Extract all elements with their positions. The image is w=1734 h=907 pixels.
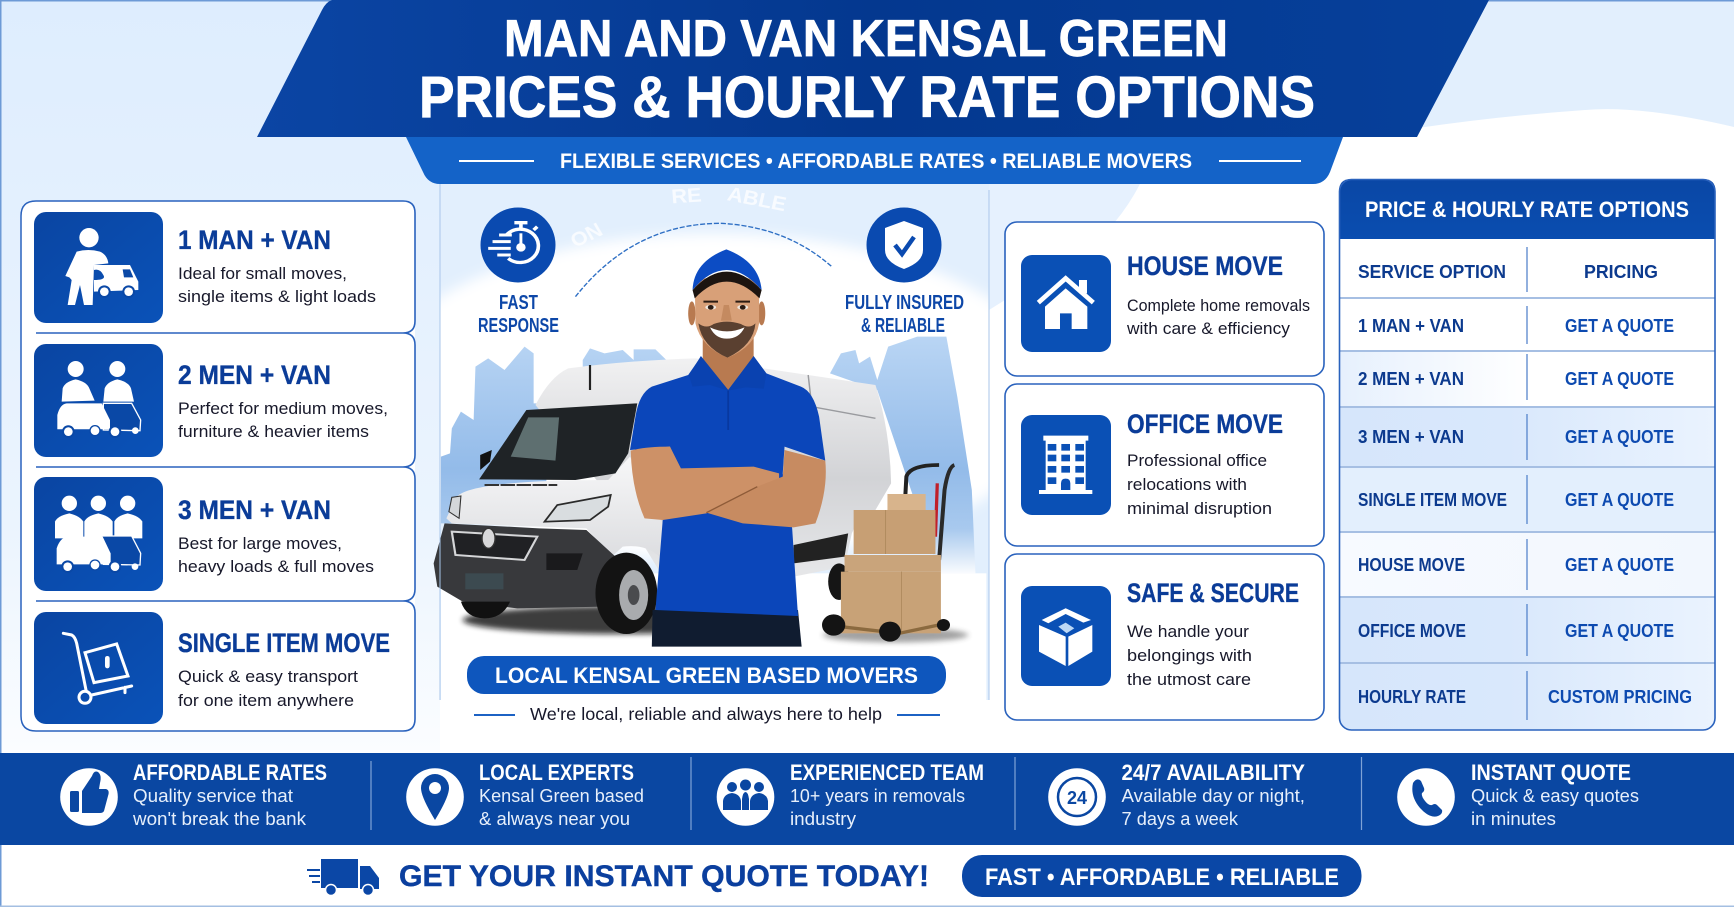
text: won't break the bank xyxy=(132,808,307,829)
heading: SAFE & SECURE xyxy=(1127,578,1299,608)
benefit: affordable rates xyxy=(60,760,327,829)
description: single items & light loads xyxy=(178,287,376,306)
column headers: SERVICE OPTION xyxy=(1358,261,1506,282)
heading: HOUSE MOVE xyxy=(1127,251,1283,281)
boxes on trolley xyxy=(822,465,954,642)
card: safe and secure xyxy=(1005,554,1324,720)
row: hourly rate xyxy=(1358,686,1692,707)
description xyxy=(1127,451,1272,518)
heading: 2 MEN + VAN xyxy=(178,360,331,390)
heading: SINGLE ITEM MOVE xyxy=(178,628,390,658)
description xyxy=(178,534,374,576)
table header: PRICE & HOURLY RATE OPTIONS xyxy=(1365,197,1689,222)
benefit: local experts xyxy=(406,760,644,829)
text: LOCAL EXPERTS xyxy=(479,760,634,785)
text: industry xyxy=(790,808,857,829)
icon: thumbs up xyxy=(60,768,118,826)
description xyxy=(178,264,376,306)
text: Available day or night, xyxy=(1122,785,1305,806)
text xyxy=(479,760,644,829)
description: furniture & heavier items xyxy=(178,422,369,441)
text xyxy=(132,760,327,829)
benefit: availability xyxy=(1048,760,1305,829)
benefit: instant quote xyxy=(1397,760,1639,829)
panel: right service cards xyxy=(1005,222,1324,720)
heading: OFFICE MOVE xyxy=(1127,409,1283,439)
call to action bar xyxy=(307,855,1362,897)
panel: left service cards xyxy=(21,201,415,731)
icon: 24 hour clock xyxy=(1048,768,1106,826)
column headers: PRICING xyxy=(1584,261,1658,282)
text: Quality service that xyxy=(133,785,293,806)
text: EXPERIENCED TEAM xyxy=(790,760,984,785)
label: & RELIABLE xyxy=(861,315,945,337)
card: house move xyxy=(1005,222,1324,376)
icon: shield xyxy=(866,208,942,282)
heading: 3 MEN + VAN xyxy=(178,495,331,525)
row: single item move: GET A QUOTE xyxy=(1565,489,1674,510)
icon: delivery truck xyxy=(307,859,379,896)
subtitle ribbon xyxy=(406,137,1343,184)
icon: house xyxy=(1021,255,1111,352)
icon: office building xyxy=(1021,415,1111,515)
text: AFFORDABLE RATES xyxy=(133,760,327,785)
city skyline xyxy=(441,337,975,573)
description: Ideal for small moves, xyxy=(178,264,347,283)
tagline: We're local, reliable and always here to help xyxy=(530,704,882,724)
description: Best for large moves, xyxy=(178,534,342,553)
icon: hand trolley xyxy=(34,612,163,724)
row: house move: GET A QUOTE xyxy=(1565,554,1674,575)
row: 3 men + van xyxy=(1358,426,1674,447)
subtitle text: FLEXIBLE SERVICES • AFFORDABLE RATES • RELIABLE MOVERS xyxy=(560,149,1192,173)
description xyxy=(178,399,388,441)
text: Kensal Green based xyxy=(479,785,644,806)
text: & always near you xyxy=(479,808,630,829)
benefit: experienced team xyxy=(717,760,984,829)
description: the utmost care xyxy=(1127,670,1251,689)
faded arc lettering: ON xyxy=(567,219,607,253)
row: office move: OFFICE MOVE xyxy=(1358,620,1466,641)
text: 7 days a week xyxy=(1122,808,1239,829)
row: 2 men + van: 2 MEN + VAN xyxy=(1358,368,1464,389)
row: house move: HOUSE MOVE xyxy=(1358,554,1465,575)
icon: team xyxy=(717,768,774,826)
label xyxy=(845,292,964,337)
row: office move xyxy=(1358,620,1674,641)
description: Complete home removals xyxy=(1127,296,1310,315)
row: 1 man + van xyxy=(1358,315,1674,336)
faded arc lettering: RE xyxy=(671,184,702,208)
row: house move xyxy=(1358,554,1674,575)
title line 1: MAN AND VAN KENSAL GREEN xyxy=(504,10,1228,68)
icon: 24 hour clock: 24 xyxy=(1067,788,1087,808)
card: single item move xyxy=(34,612,390,724)
pill: local movers xyxy=(467,656,946,694)
icon: secure box xyxy=(1021,586,1111,686)
row: 3 men + van: 3 MEN + VAN xyxy=(1358,426,1464,447)
description xyxy=(178,667,358,710)
icon: map pin xyxy=(406,768,464,826)
pill: fast affordable reliable: FAST • AFFORDABLE • RELIABLE xyxy=(985,864,1339,891)
text xyxy=(1471,760,1639,829)
description: Quick & easy transport xyxy=(178,667,358,686)
label: FULLY INSURED xyxy=(845,292,964,314)
badge: fully insured xyxy=(845,208,964,337)
row: hourly rate: CUSTOM PRICING xyxy=(1548,686,1692,707)
van photo xyxy=(434,358,891,634)
icon: man and van xyxy=(34,212,163,323)
description: with care & efficiency xyxy=(1126,319,1291,338)
row: 1 man + van: GET A QUOTE xyxy=(1565,315,1674,336)
title banner xyxy=(257,0,1489,137)
card: 2 men + van xyxy=(34,344,388,457)
row: 2 men + van xyxy=(1358,368,1674,389)
panel: price table xyxy=(1339,179,1716,730)
mover with arms crossed xyxy=(630,249,826,647)
description xyxy=(1127,622,1252,689)
heading: 1 MAN + VAN xyxy=(178,225,331,255)
row: office move: GET A QUOTE xyxy=(1565,620,1674,641)
card: office move xyxy=(1005,384,1324,546)
description: heavy loads & full moves xyxy=(178,557,374,576)
description: Perfect for medium moves, xyxy=(178,399,388,418)
pill text: LOCAL KENSAL GREEN BASED MOVERS xyxy=(495,663,918,688)
description: minimal disruption xyxy=(1127,499,1272,518)
card: 3 men + van xyxy=(34,477,374,591)
ground shadow xyxy=(463,606,775,634)
icon: three men and van xyxy=(34,477,163,591)
label: RESPONSE xyxy=(478,315,559,337)
column headers xyxy=(1358,261,1658,282)
description xyxy=(1126,296,1310,338)
label xyxy=(478,292,559,337)
table header xyxy=(1339,179,1716,239)
row: 2 men + van: GET A QUOTE xyxy=(1565,368,1674,389)
description: for one item anywhere xyxy=(178,691,354,710)
text xyxy=(1122,760,1305,829)
description: relocations with xyxy=(1127,475,1247,494)
trolley shadow xyxy=(823,628,968,642)
faded arc lettering xyxy=(567,183,788,253)
pill: fast affordable reliable xyxy=(962,855,1362,897)
text xyxy=(790,760,984,829)
row: hourly rate: HOURLY RATE xyxy=(1358,686,1466,707)
icon: stopwatch xyxy=(480,208,556,282)
panel: centre hero xyxy=(434,184,989,724)
card: 1 man + van xyxy=(34,212,376,323)
row: 3 men + van: GET A QUOTE xyxy=(1565,426,1674,447)
faded arc lettering: ABLE xyxy=(725,183,788,216)
text: 10+ years in removals xyxy=(790,785,965,806)
text: Quick & easy quotes xyxy=(1471,785,1639,806)
row: 1 man + van: 1 MAN + VAN xyxy=(1358,315,1464,336)
text: in minutes xyxy=(1471,808,1556,829)
row: single item move xyxy=(1358,489,1674,510)
call to action heading: GET YOUR INSTANT QUOTE TODAY! xyxy=(399,860,929,893)
badge: fast response xyxy=(478,208,559,337)
panel: benefits band xyxy=(0,753,1734,845)
title line 2: PRICES & HOURLY RATE OPTIONS xyxy=(419,65,1315,130)
icon: phone xyxy=(1397,768,1455,826)
description: belongings with xyxy=(1127,646,1252,665)
panel dividers xyxy=(440,184,989,700)
label: FAST xyxy=(499,292,538,314)
text: 24/7 AVAILABILITY xyxy=(1122,760,1305,785)
row: single item move: SINGLE ITEM MOVE xyxy=(1358,489,1507,510)
description: Professional office xyxy=(1127,451,1267,470)
text: INSTANT QUOTE xyxy=(1471,760,1631,785)
icon: two men and van xyxy=(34,344,163,457)
description: We handle your xyxy=(1127,622,1249,641)
